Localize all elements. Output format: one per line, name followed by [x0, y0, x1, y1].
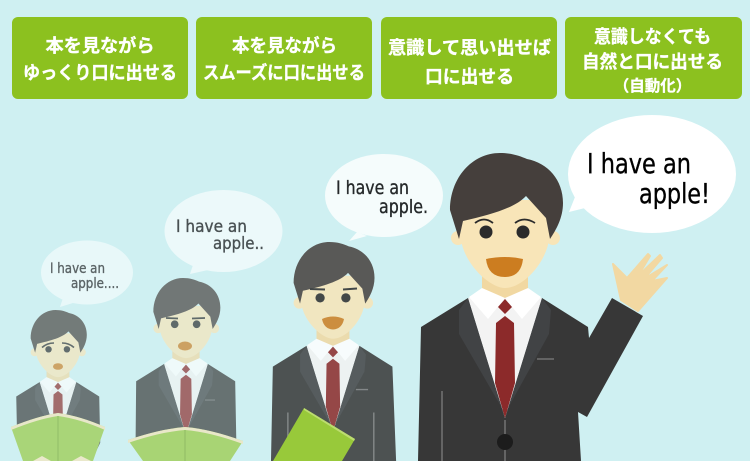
panel: automatic: [565, 17, 742, 99]
ears: [451, 231, 560, 245]
speech bubble: beginner: I have an: [50, 261, 105, 277]
collar: [469, 288, 541, 319]
speech bubble: confident speaker: apple!: [639, 177, 710, 210]
speech bubble: reader: I have an: [176, 217, 247, 237]
speech bubble: confident speaker: I have an: [587, 147, 691, 180]
neck: [482, 270, 528, 300]
eyes: [480, 226, 530, 238]
jacket seams: [442, 359, 554, 461]
eyebrows: [475, 220, 535, 223]
figure: confident speaker waving: [418, 153, 667, 461]
panel: read smoothly from the book: [196, 17, 372, 99]
face: [461, 200, 549, 288]
panel: recall consciously: 口に出せる: [425, 67, 514, 87]
icon: green folder: [273, 408, 355, 461]
panel: automatic: 意識しなくても: [594, 27, 711, 47]
panel: read slowly from the book: ゆっくり口に出せる: [23, 63, 177, 83]
panel: automatic: 自然と口に出せる: [582, 51, 723, 72]
panel: read slowly from the book: 本を見ながら: [46, 35, 154, 56]
speech bubble: speaker: [325, 154, 443, 241]
speech bubble: reader: apple..: [213, 234, 264, 254]
figure: beginner with open book: [11, 310, 105, 461]
speech bubble: speaker: I have an: [336, 177, 409, 199]
hair: [450, 153, 563, 239]
panel: recall consciously: 意識して思い出せば: [388, 38, 551, 58]
speech bubble: beginner: apple....: [71, 276, 119, 292]
panel: automatic: （自動化）: [614, 77, 691, 95]
lapels: [459, 298, 551, 418]
speech bubble: reader: [164, 190, 282, 274]
speech bubble: speaker: apple.: [379, 196, 428, 218]
open mouth: [486, 257, 523, 277]
panel: read slowly from the book: [12, 17, 188, 99]
shirt: [468, 298, 542, 418]
figure: speaker with folder: [271, 242, 397, 461]
jacket with raised arm: [418, 298, 643, 461]
panel: recall consciously: [381, 17, 557, 99]
figure: reader with open book: [128, 278, 243, 461]
panel: read smoothly from the book: スムーズに口に出せる: [203, 62, 365, 83]
speech bubble: confident speaker: [568, 115, 736, 233]
panel: read smoothly from the book: 本を見ながら: [232, 35, 337, 56]
speech bubble: beginner: [41, 240, 133, 307]
jacket button: [497, 434, 513, 450]
necktie: [495, 299, 515, 418]
icon: waving hand: [613, 254, 667, 311]
